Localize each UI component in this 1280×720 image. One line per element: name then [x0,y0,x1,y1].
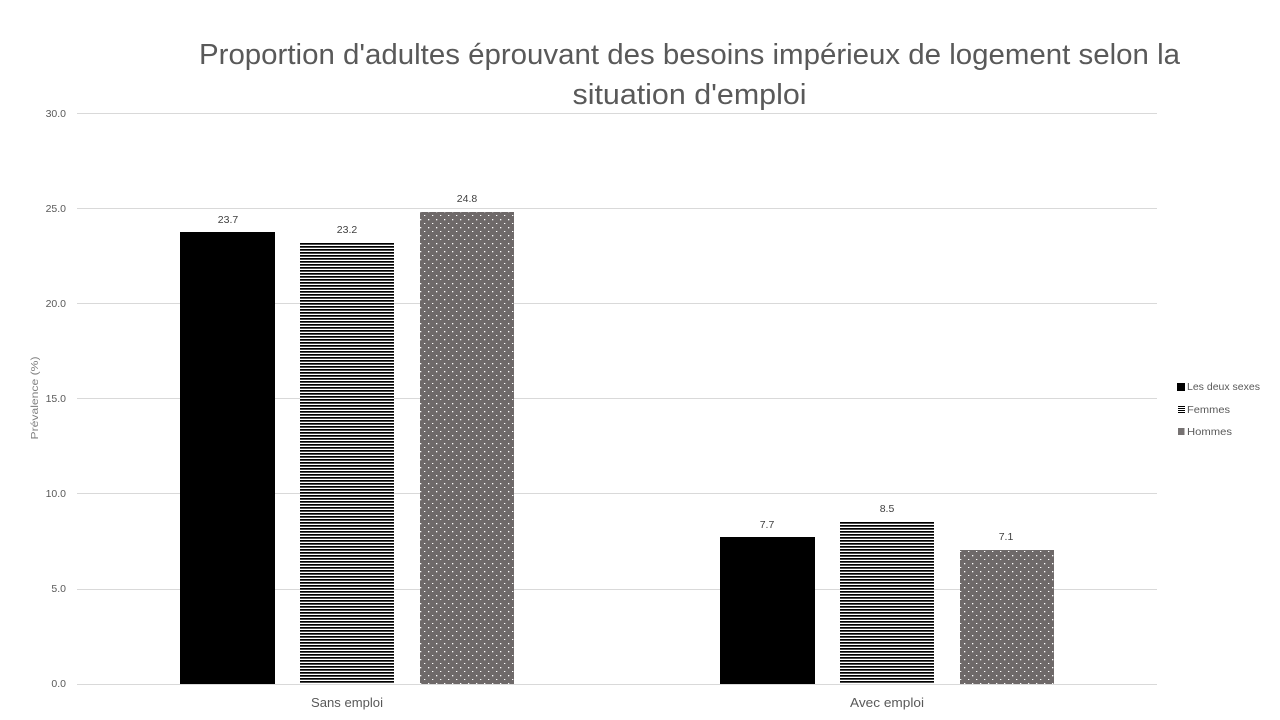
data labels: 8.5 [880,503,894,515]
legend: Hommes [1187,426,1232,438]
legend: Femmes [1187,404,1230,416]
y axis labels: 30.0 [46,108,66,120]
bars: Avec emploi [720,521,1054,684]
y axis title: Prévalence (%) [29,356,41,440]
category labels [311,696,924,710]
y axis labels [46,108,66,690]
data labels [218,193,1013,543]
title: Proportion d'adultes éprouvant des besoins impérieux de logement selon la [199,39,1181,71]
y axis labels: 20.0 [46,298,66,310]
y axis labels: 25.0 [46,203,66,215]
data labels: 7.1 [999,531,1013,543]
category labels: Sans emploi [311,696,383,710]
data labels: 23.7 [218,214,238,226]
y axis labels: 0.0 [51,678,66,690]
category labels: Avec emploi [850,696,924,710]
y axis labels: 10.0 [46,488,66,500]
y axis labels: 15.0 [46,393,66,405]
data labels: 24.8 [457,193,477,205]
y axis labels: 5.0 [51,583,66,595]
data labels: 23.2 [337,224,357,236]
legend [1177,381,1260,438]
bars: Sans emploi [180,212,514,684]
title [199,39,1181,111]
legend: Les deux sexes [1187,381,1260,393]
data labels: 7.7 [760,519,774,531]
title: situation d'emploi [572,79,806,111]
